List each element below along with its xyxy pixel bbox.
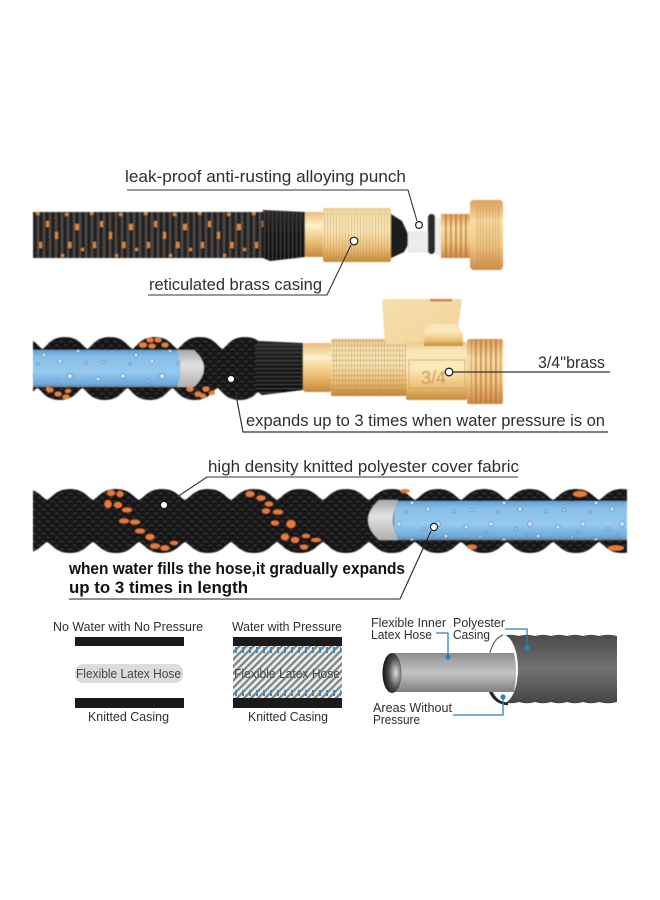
white insert [408, 232, 428, 252]
black cone [391, 214, 408, 258]
valve knob [424, 321, 463, 346]
brass ring [305, 212, 324, 257]
latex hose pill: Flexible Latex Hose [76, 666, 181, 681]
diagram: water with pressure [232, 619, 342, 724]
collapsed hose fabric [33, 212, 263, 258]
label: leak-proof punch: leak-proof anti-rusting alloying punch [125, 167, 406, 186]
ring outline [488, 635, 503, 703]
orange stripes on fabric [104, 489, 624, 551]
bottom casing bar [75, 698, 184, 708]
callout: water fills the hose: up to 3 times in length [69, 579, 248, 597]
brass ring [303, 343, 332, 392]
hose 2: expanded hose with valve [0, 299, 610, 432]
lower ring shadow [490, 691, 508, 704]
orange weave on crests [46, 338, 215, 399]
fabric artwork [1, 489, 645, 553]
label: 3/4 brass: 3/4''brass [538, 353, 605, 372]
top casing bar [75, 637, 184, 646]
label: polyester casing: Polyester [453, 615, 506, 630]
grey tube end [368, 500, 398, 540]
polyester casing [496, 635, 617, 703]
tube opening [382, 653, 402, 693]
inner latex tube [392, 653, 516, 692]
reticulated brass casing [323, 208, 391, 262]
label: high density cover [161, 457, 519, 508]
top casing bar [233, 637, 342, 646]
label: polyester casing [453, 615, 530, 651]
callout: water fills the hose [68, 523, 438, 599]
callout: water fills the hose: when water fills the hose,it gradually expands [68, 560, 405, 578]
grey tube end [177, 350, 204, 387]
label: expands up to 3 times [228, 376, 608, 432]
black rubber collar [263, 210, 305, 261]
ribbed brass casing [331, 339, 406, 396]
casing label: Knitted Casing [248, 709, 328, 724]
black rubber collar [255, 341, 303, 395]
blue inner tube with droplets [394, 501, 627, 540]
label: leak-proof punch [125, 167, 422, 228]
hose 1: brass connector assembly [33, 167, 503, 295]
label: flexible inner latex hose: Latex Hose [371, 627, 432, 642]
threaded brass insert [435, 214, 471, 258]
label: expands up to 3 times: expands up to 3 times when water pressure is on [246, 411, 605, 430]
heading: Water with Pressure [232, 619, 342, 634]
valve body marked 3/4: 3/4 [421, 368, 446, 388]
label: polyester casing: Casing [453, 627, 490, 642]
diagram: hose cross-section [371, 615, 617, 727]
label: flexible inner latex hose [371, 615, 451, 660]
heading: No Water with No Pressure [53, 619, 203, 634]
hatched water-filled hose: Flexible Latex Hose [234, 666, 340, 681]
label: areas without pressure: Areas Without [373, 700, 452, 715]
casing label: Knitted Casing [88, 709, 169, 724]
label: 3/4 brass [445, 353, 610, 376]
male thread outlet [467, 339, 503, 404]
valve lever [382, 299, 462, 344]
hose 3: knitted fabric with blue inner tube [1, 457, 645, 599]
knitted fabric waves [32, 336, 260, 401]
label: areas without pressure: Pressure [373, 712, 420, 727]
label: reticulated brass casing: reticulated brass casing [149, 275, 322, 294]
connector artwork [33, 200, 503, 270]
label: flexible inner latex hose: Flexible Inner [371, 615, 447, 630]
blue inner latex tube with droplets [33, 350, 181, 387]
valve body marked 3/4 [406, 342, 467, 400]
label: high density cover: high density knitted polyester cover fabric [208, 457, 519, 476]
label: reticulated brass casing [148, 237, 358, 295]
casing opening ring [488, 635, 518, 703]
brass nut [470, 200, 503, 270]
knitted fabric body [1, 489, 645, 553]
rubber O-ring [428, 214, 435, 254]
bottom casing bar [233, 698, 342, 708]
valve hose artwork [0, 299, 503, 404]
label: areas without pressure [373, 694, 506, 727]
diagram: no water with no pressure [53, 619, 203, 724]
